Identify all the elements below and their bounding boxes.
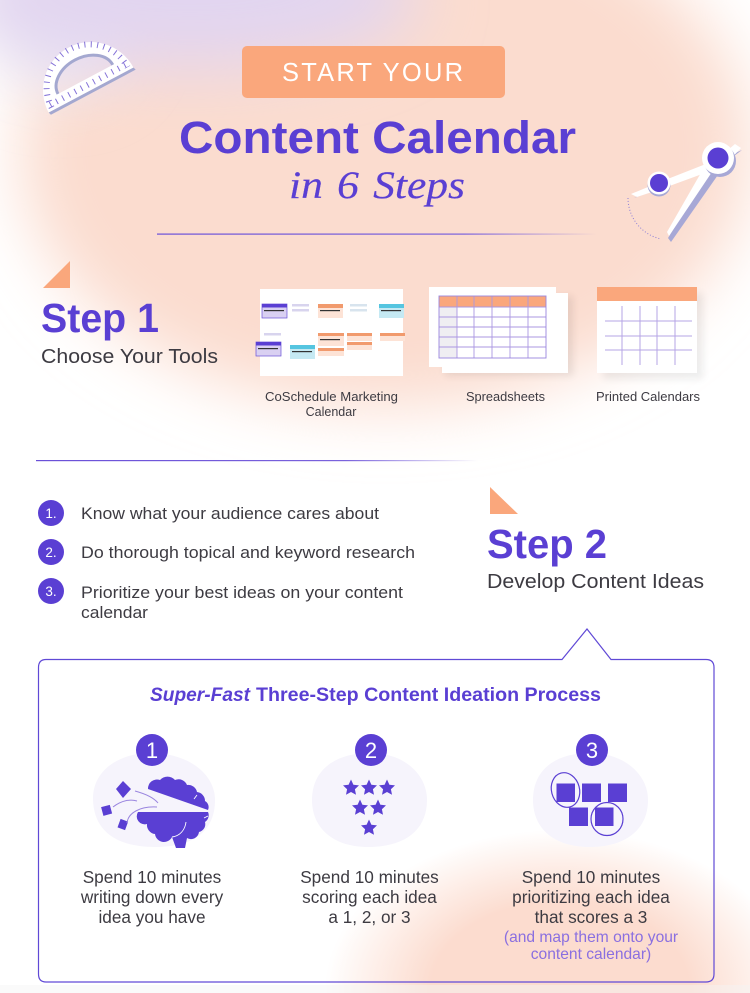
item 1: 1.	[45, 506, 57, 521]
step 3 note: (and map them onto your	[504, 929, 678, 946]
step 2 text: Spend 10 minutes	[300, 867, 439, 887]
divider	[36, 460, 478, 461]
banner: start your	[242, 46, 505, 98]
item 2: Do thorough topical and keyword research	[81, 544, 415, 562]
list: ideas	[38, 500, 415, 622]
step 1 text: idea you have	[98, 907, 206, 927]
step 1 heading	[41, 261, 218, 368]
panel: ideation process	[38, 629, 714, 982]
label: coschedule: Calendar	[306, 405, 356, 419]
banner: start your: START YOUR	[282, 59, 463, 87]
item 3	[38, 578, 403, 622]
label: printed calendars: Printed Calendars	[596, 390, 700, 404]
label: coschedule	[265, 390, 398, 419]
step 1: brain icon: 1	[146, 738, 158, 763]
item 1: Know what your audience cares about	[81, 505, 379, 523]
label: spreadsheets: Spreadsheets	[466, 390, 545, 404]
step 2 heading	[487, 487, 704, 593]
title: Content Calendar	[179, 112, 576, 163]
step 2 heading: Develop Content Ideas	[487, 571, 704, 593]
item 3: Prioritize your best ideas on your content	[81, 584, 403, 602]
panel heading continued: Three-Step Content Ideation Process	[256, 685, 601, 706]
step 2 text: scoring each idea	[302, 887, 437, 907]
step 1: brain icon	[93, 734, 215, 848]
subtitle: in 6 Steps	[289, 164, 465, 207]
step 3: squares icon: 3	[586, 738, 598, 763]
step 1 text: Spend 10 minutes	[83, 867, 221, 887]
tool: printed calendar	[597, 287, 703, 379]
step 2 text: a 1, 2, or 3	[328, 907, 411, 927]
step 3 note: content calendar)	[531, 946, 651, 963]
step 3: squares icon	[533, 734, 648, 847]
panel heading: Super-Fast	[150, 685, 251, 706]
tool: spreadsheets	[429, 287, 573, 376]
tool: coschedule calendar	[256, 289, 405, 376]
item 3: 3.	[45, 584, 57, 599]
item 2	[38, 539, 415, 565]
item 2: 2.	[45, 545, 57, 560]
icon: protractor	[26, 25, 136, 115]
step 3 text: that scores a 3	[535, 907, 647, 927]
step 1 heading: Step 1	[41, 295, 159, 341]
step 2 heading: Step 2	[487, 521, 607, 567]
step 3 text: prioritizing each idea	[512, 887, 670, 907]
icon: compass	[628, 142, 742, 242]
step 2: stars icon: 2	[365, 738, 377, 763]
item 1	[38, 500, 379, 526]
step 1 heading: Choose Your Tools	[41, 346, 218, 368]
divider	[157, 234, 597, 235]
step 3 text: Spend 10 minutes	[522, 867, 660, 887]
label: coschedule: CoSchedule Marketing	[265, 390, 398, 404]
item 3: calendar	[81, 604, 149, 622]
step 1 text: writing down every	[80, 887, 224, 907]
step 2: stars icon	[312, 734, 427, 847]
